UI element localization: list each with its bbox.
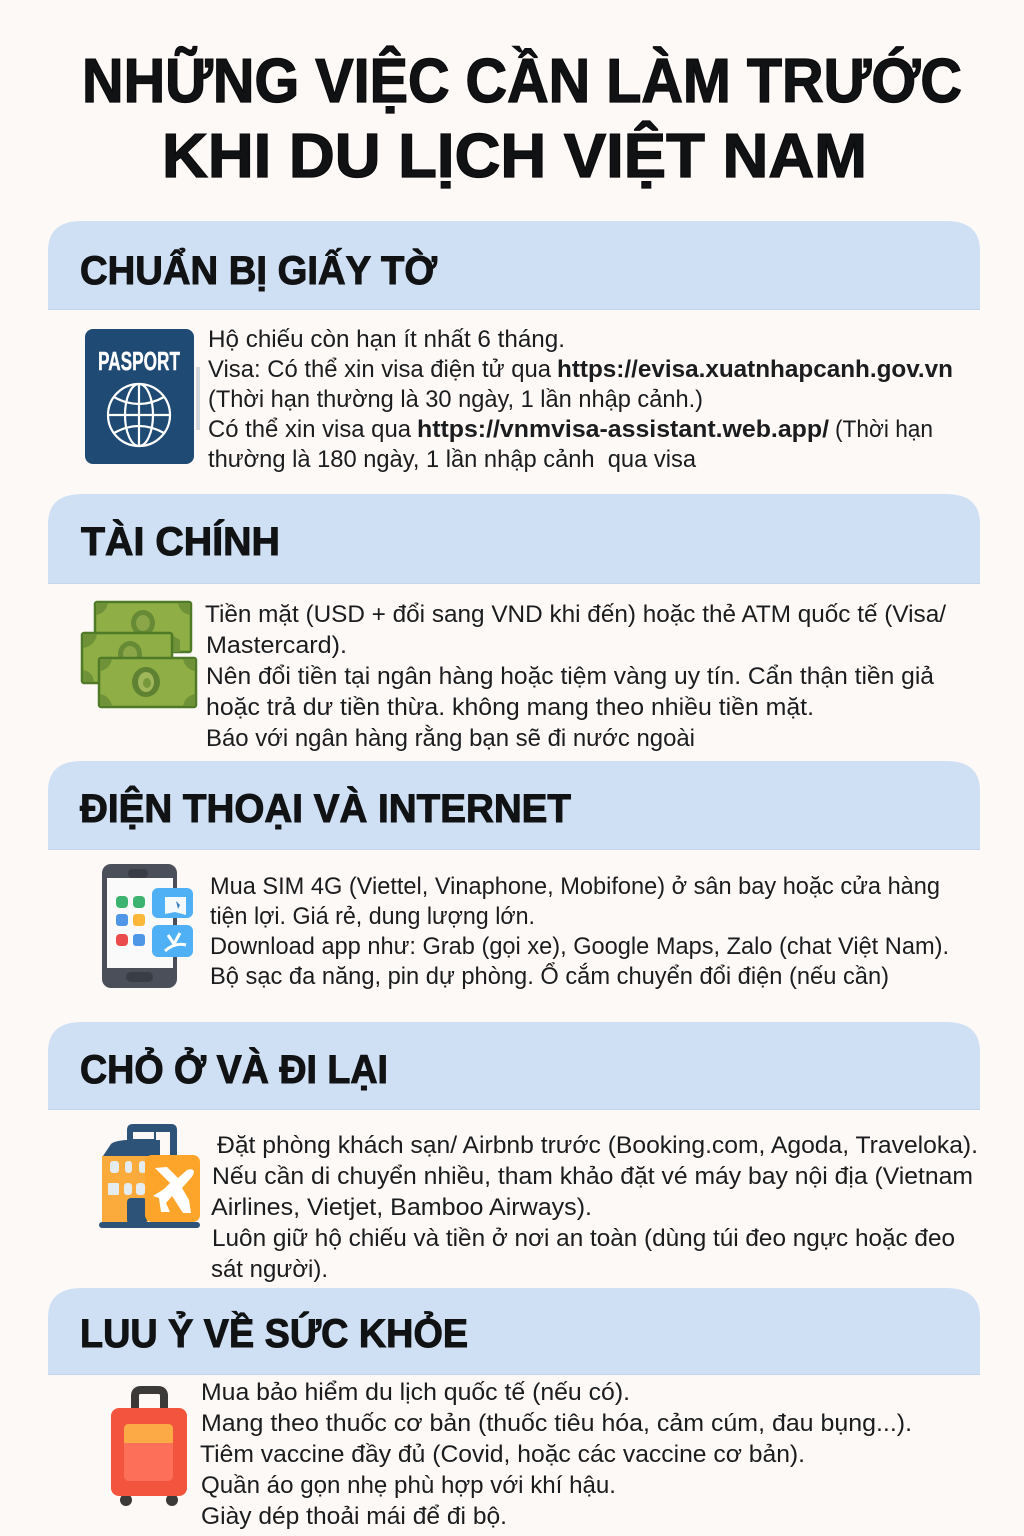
text block: chỗ ở: sát người). xyxy=(211,1256,328,1283)
title: KHI DU LỊCH VIỆT NAM xyxy=(162,122,867,191)
icon: suitcase xyxy=(111,1390,187,1506)
text block: giấy tờ: Hộ chiếu còn hạn ít nhất 6 tháng. xyxy=(208,326,565,353)
text block: giấy tờ: (Thời hạn thường là 30 ngày, 1 lần nhập cảnh.) xyxy=(208,386,703,413)
heading band: chuẩn bị giấy tờ: CHUẨN BỊ GIẤY TỜ xyxy=(80,246,438,293)
title: NHỮNG VIỆC CẦN LÀM TRƯỚC xyxy=(82,47,962,116)
text block: sức khỏe: Mang theo thuốc cơ bản (thuốc tiêu hóa, cảm cúm, đau bụng...). xyxy=(201,1410,912,1437)
text block: sức khỏe xyxy=(200,1379,912,1530)
text block: điện thoại: Download app như: Grab (gọi xe), Google Maps, Zalo (chat Việt Nam). xyxy=(210,933,949,960)
text block: sức khỏe: Tiêm vaccine đầy đủ (Covid, hoặc các vaccine cơ bản). xyxy=(200,1441,805,1468)
heading band: lưu ý về sức khỏe: LUU Ỷ VỀ SỨC KHỎE xyxy=(80,1310,468,1356)
icon: hotel and plane xyxy=(99,1124,200,1228)
heading band: chỗ ở và đi lại xyxy=(48,1022,980,1110)
text block: chỗ ở: Đặt phòng khách sạn/ Airbnb trước (Booking.com, Agoda, Traveloka). xyxy=(217,1132,978,1159)
text block: giấy tờ: thường là 180 ngày, 1 lần nhập cảnh qua visa xyxy=(208,446,697,473)
text block: điện thoại: Bộ sạc đa năng, pin dự phòng. Ổ cắm chuyển đổi điện (nếu cần) xyxy=(210,962,889,990)
heading band: lưu ý về sức khỏe xyxy=(48,1288,980,1375)
text block: tài chính: hoặc trả dư tiền thừa. không mang theo nhiều tiền mặt. xyxy=(206,694,814,721)
icon: passport: PASPORT xyxy=(98,346,180,376)
text block: chỗ ở xyxy=(211,1132,978,1283)
heading band: tài chính xyxy=(48,494,980,584)
heading band: điện thoại và internet: ĐIỆN THOẠI VÀ INTERNET xyxy=(80,785,571,831)
heading band: tài chính: TÀI CHÍNH xyxy=(81,519,280,564)
text block: chỗ ở: Nếu cần di chuyển nhiều, tham khảo đặt vé máy bay nội địa (Vietnam xyxy=(212,1163,973,1190)
text block: tài chính: Nên đổi tiền tại ngân hàng hoặc tiệm vàng uy tín. Cẩn thận tiền giả xyxy=(206,663,935,690)
text block: giấy tờ: https://evisa.xuatnhapcanh.gov.vn xyxy=(557,356,953,383)
heading band: điện thoại và internet xyxy=(48,761,980,850)
text block: tài chính: Tiền mặt (USD + đổi sang VND khi đến) hoặc thẻ ATM quốc tế (Visa/ xyxy=(205,601,946,628)
text block: chỗ ở: Airlines, Vietjet, Bamboo Airways). xyxy=(211,1194,592,1221)
text block: điện thoại xyxy=(210,873,949,990)
text block: giấy tờ: Visa: Có thể xin visa điện tử qua xyxy=(208,356,552,383)
text block: giấy tờ: Có thể xin visa qua xyxy=(208,416,412,443)
text block: chỗ ở: Luôn giữ hộ chiếu và tiền ở nơi an toàn (dùng túi đeo ngực hoặc đeo xyxy=(212,1225,955,1252)
text block: tài chính: Mastercard). xyxy=(206,632,347,659)
text block: sức khỏe: Giày dép thoải mái để đi bộ. xyxy=(201,1503,507,1530)
icon: smartphone with apps xyxy=(102,864,193,988)
text block: điện thoại: Mua SIM 4G (Viettel, Vinaphone, Mobifone) ở sân bay hoặc cửa hàng xyxy=(210,873,940,900)
panel: điện thoại và internet xyxy=(48,761,980,990)
panel: chỗ ở và đi lại xyxy=(48,1022,980,1283)
panel: tài chính xyxy=(48,494,980,752)
heading band: chỗ ở và đi lại: CHỎ Ở VÀ ĐI LẠI xyxy=(80,1046,388,1092)
text block: tài chính: Báo với ngân hàng rằng bạn sẽ đi nước ngoài xyxy=(206,725,695,752)
icon: passport xyxy=(85,329,200,464)
heading band: chuẩn bị giấy tờ xyxy=(48,221,980,310)
text block: giấy tờ: (Thời hạn xyxy=(835,416,933,443)
text block: giấy tờ: https://vnmvisa-assistant.web.app/ xyxy=(417,416,829,443)
title xyxy=(82,47,962,191)
panel: chuẩn bị giấy tờ xyxy=(48,221,980,473)
text block: điện thoại: tiện lợi. Giá rẻ, dung lượng lớn. xyxy=(210,903,535,930)
text block: tài chính xyxy=(205,601,946,752)
panel: lưu ý về sức khỏe xyxy=(48,1288,980,1530)
icon: banknotes xyxy=(82,602,196,707)
text block: sức khỏe: Quần áo gọn nhẹ phù hợp với khí hậu. xyxy=(201,1472,616,1499)
text block: giấy tờ xyxy=(208,326,953,473)
text block: sức khỏe: Mua bảo hiểm du lịch quốc tế (nếu có). xyxy=(201,1379,630,1406)
